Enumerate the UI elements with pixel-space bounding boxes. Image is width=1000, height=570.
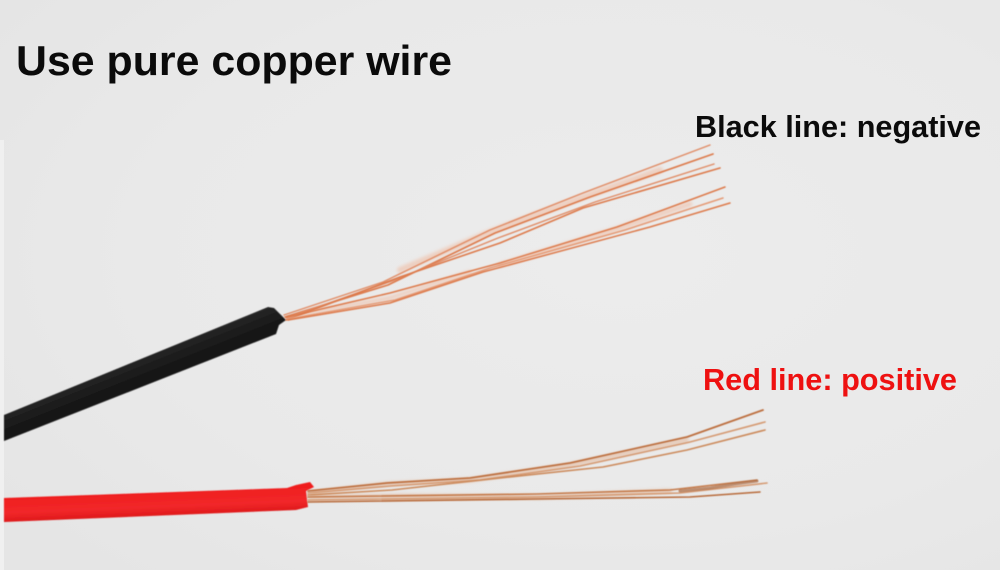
red wire copper strands, upper bundle	[308, 410, 765, 495]
black wire copper strands, lower bundle	[287, 187, 730, 320]
label: black line negative: Black line: negative	[695, 109, 981, 144]
black wire insulation	[4, 307, 286, 441]
label: red line positive: Red line: positive	[703, 362, 957, 397]
red wire	[4, 410, 767, 522]
title: Use pure copper wire	[16, 37, 452, 84]
red wire copper glow	[310, 440, 687, 497]
black wire copper strands, upper bundle	[284, 145, 720, 320]
black wire	[4, 145, 730, 441]
red wire copper strands, lower bundle	[308, 480, 767, 502]
red wire insulation	[4, 482, 314, 522]
black wire copper glow	[300, 170, 690, 314]
